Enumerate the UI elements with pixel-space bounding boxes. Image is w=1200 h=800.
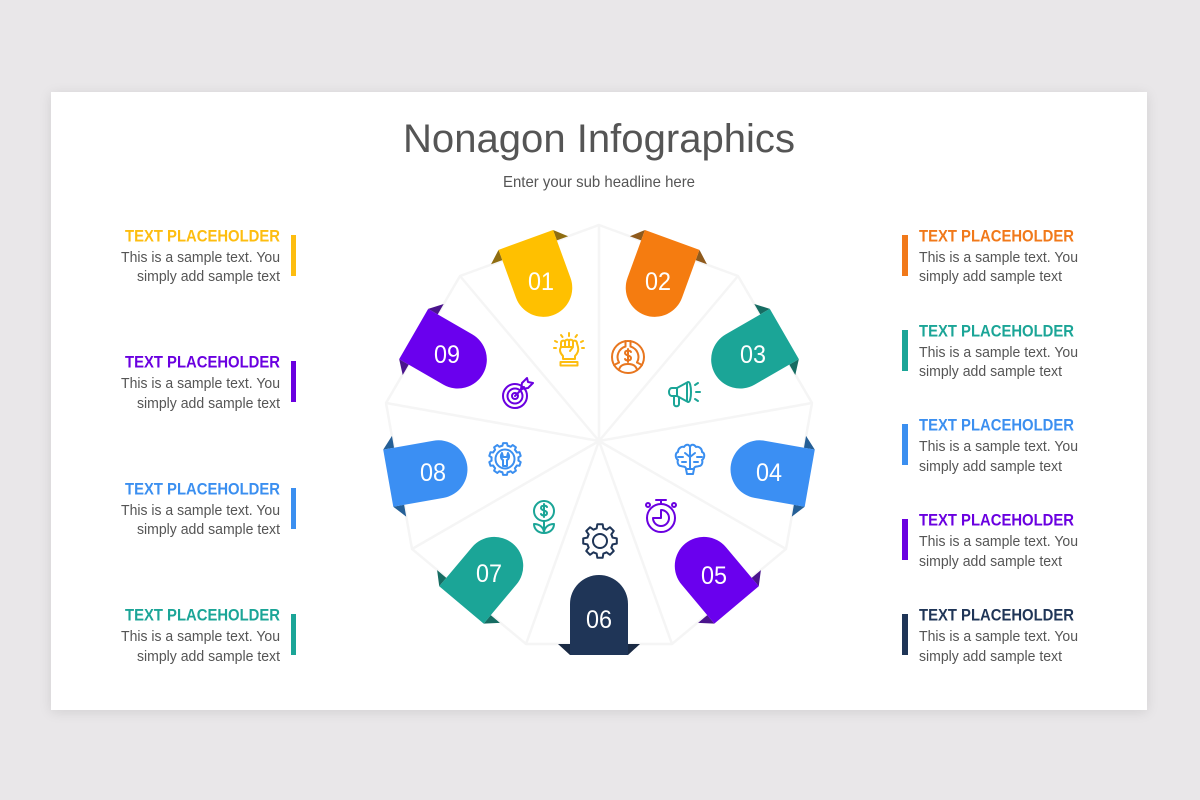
- right text block 5: TEXT PLACEHOLDER: [919, 606, 1074, 624]
- icon: gear: [583, 524, 617, 558]
- left text block 3: This is a sample text. You: [121, 503, 280, 519]
- ribbon 05: [654, 517, 768, 631]
- ribbon 03: [695, 298, 805, 410]
- right text block 4: simply add sample text: [919, 554, 1062, 570]
- card background: [51, 92, 1147, 710]
- left text block 2: [121, 352, 296, 412]
- icon: brain bulb: [676, 445, 704, 474]
- icon: dollar wheel: [612, 341, 644, 373]
- icon: megaphone: [669, 382, 700, 406]
- left text block 3: [121, 480, 296, 538]
- ribbon 04: [724, 424, 817, 519]
- number 03: 03: [740, 341, 766, 369]
- ribbon 02: [606, 226, 711, 329]
- number 06: 06: [586, 606, 612, 634]
- left text block 3: TEXT PLACEHOLDER: [125, 480, 280, 498]
- icon: stopwatch: [646, 500, 676, 532]
- right text block 1: TEXT PLACEHOLDER: [919, 226, 1074, 246]
- number 07: 07: [476, 560, 502, 588]
- left text block 4: This is a sample text. You: [121, 629, 280, 645]
- nonagon wheel: [386, 225, 812, 644]
- left text block 4: simply add sample text: [137, 649, 280, 665]
- right text block 5: [902, 606, 1078, 665]
- right text block 2: [902, 322, 1078, 380]
- right text block 3: TEXT PLACEHOLDER: [919, 416, 1074, 434]
- right text block 4: This is a sample text. You: [919, 534, 1078, 550]
- ribbon 09: [393, 298, 503, 410]
- right text block 2: simply add sample text: [919, 364, 1062, 380]
- right text block 4: TEXT PLACEHOLDER: [919, 510, 1074, 530]
- left text block 4: TEXT PLACEHOLDER: [125, 606, 280, 624]
- right text block 1: simply add sample text: [919, 269, 1062, 285]
- number 01: 01: [528, 268, 554, 296]
- right text block 3: This is a sample text. You: [919, 439, 1078, 455]
- title: Nonagon Infographics: [403, 117, 795, 161]
- ribbon 01: [487, 226, 592, 329]
- ribbon 06: [558, 575, 640, 655]
- number 08: 08: [420, 459, 446, 487]
- left text block 4: [121, 606, 296, 665]
- right text block 4: [902, 510, 1078, 570]
- number 05: 05: [701, 562, 727, 590]
- number 04: 04: [756, 459, 782, 487]
- icon: money plant: [534, 501, 554, 533]
- right text block 3: simply add sample text: [919, 459, 1062, 475]
- left text block 1: [121, 226, 296, 285]
- ribbon 08: [381, 424, 474, 519]
- right text block 5: simply add sample text: [919, 649, 1062, 665]
- icon: raised fist: [554, 333, 584, 366]
- ribbon 07: [430, 517, 544, 631]
- number 09: 09: [434, 341, 460, 369]
- left text block 1: TEXT PLACEHOLDER: [125, 226, 280, 246]
- number 02: 02: [645, 268, 671, 296]
- left text block 2: simply add sample text: [137, 396, 280, 412]
- left text block 2: TEXT PLACEHOLDER: [125, 352, 280, 372]
- left text block 1: This is a sample text. You: [121, 250, 280, 266]
- icon: target: [503, 378, 533, 408]
- icon: wrench gear: [489, 443, 521, 475]
- right text block 2: This is a sample text. You: [919, 345, 1078, 361]
- right text block 1: This is a sample text. You: [919, 250, 1078, 266]
- subtitle: Enter your sub headline here: [503, 174, 695, 191]
- right text block 2: TEXT PLACEHOLDER: [919, 322, 1074, 340]
- left text block 3: simply add sample text: [137, 522, 280, 538]
- left text block 1: simply add sample text: [137, 269, 280, 285]
- left text block 2: This is a sample text. You: [121, 376, 280, 392]
- right text block 3: [902, 416, 1078, 475]
- right text block 1: [902, 226, 1078, 285]
- right text block 5: This is a sample text. You: [919, 629, 1078, 645]
